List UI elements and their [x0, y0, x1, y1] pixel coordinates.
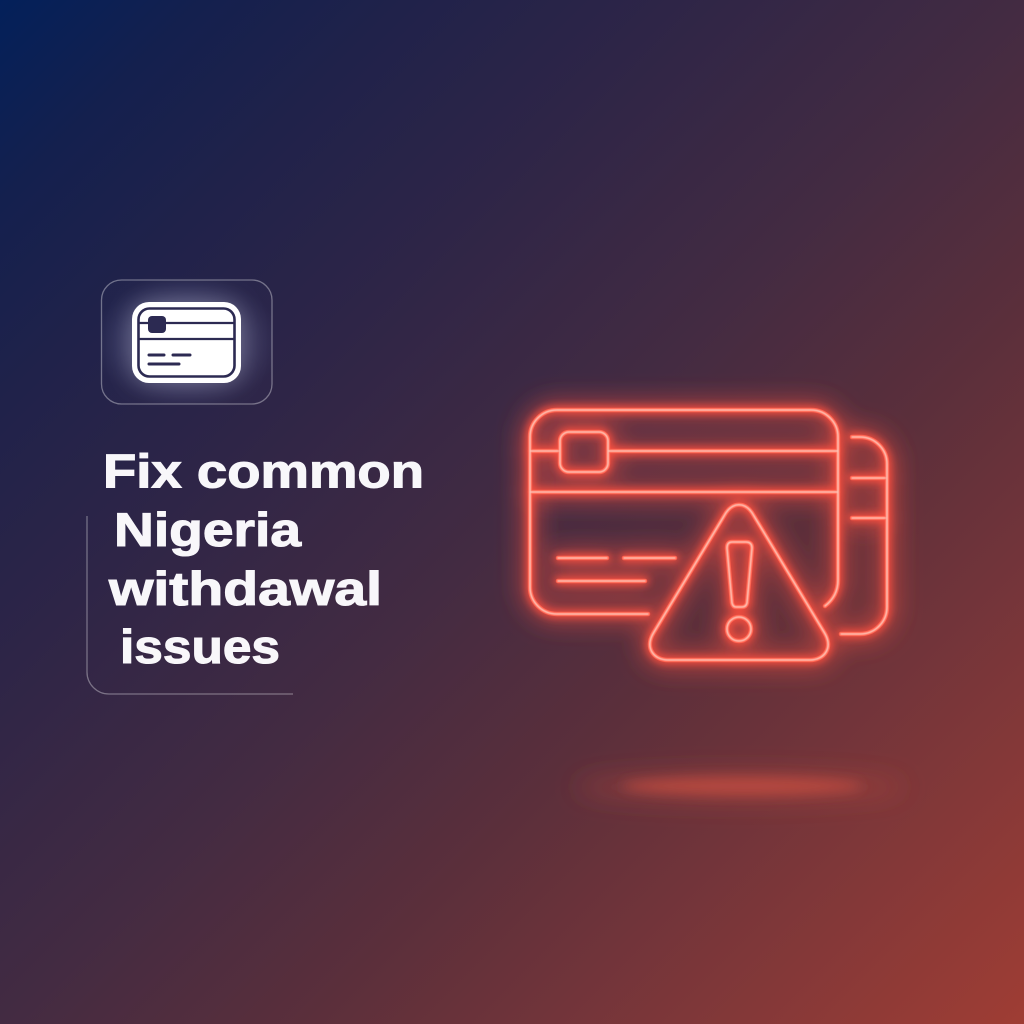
icon panel: credit card badge [101, 280, 272, 404]
title: Fix common [103, 444, 424, 498]
icon: white credit card [132, 302, 241, 383]
title: issues [120, 620, 280, 673]
decorative corner bracket [87, 516, 293, 694]
title: Nigeria [114, 503, 302, 556]
title [103, 444, 424, 673]
floor glow under icon [575, 773, 905, 801]
icon: neon credit card with warning triangle [530, 410, 887, 660]
title: withdawal [108, 562, 382, 615]
